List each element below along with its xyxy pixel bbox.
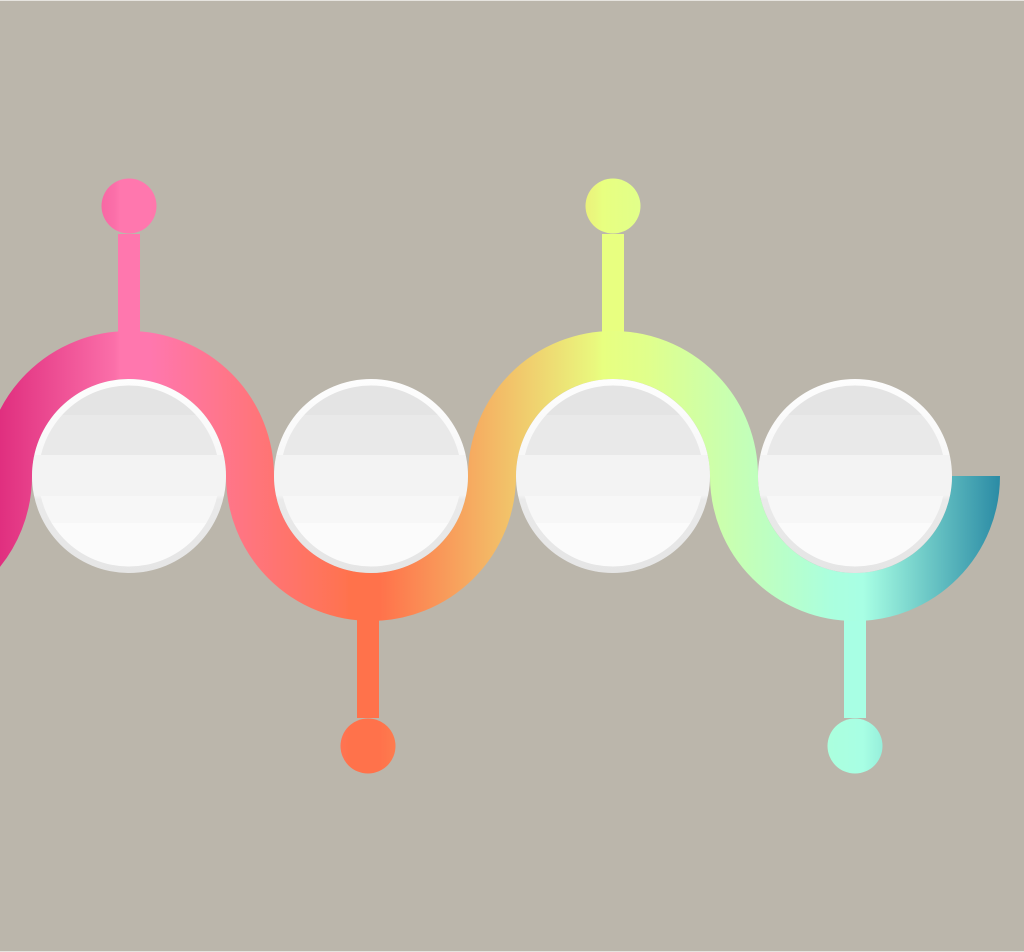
- circle 3: [514, 379, 714, 573]
- stem and node: orange: [340, 618, 396, 774]
- circle 2: [272, 379, 472, 573]
- stem and node: pink: [102, 178, 156, 334]
- gradient wave ribbon: [0, 355, 976, 597]
- circle 1: [30, 379, 230, 573]
- stem and node: yellow: [586, 178, 640, 334]
- circle 4: [756, 379, 956, 573]
- stem and node: mint: [828, 618, 882, 774]
